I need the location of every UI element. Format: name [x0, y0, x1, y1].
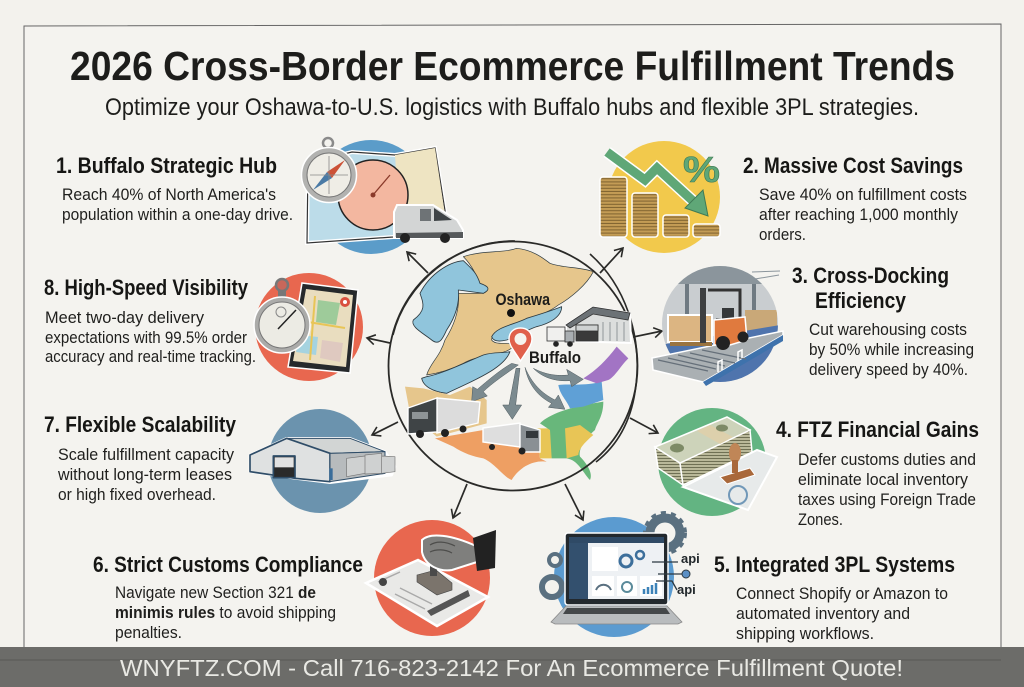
text 4: FTZ Financial Gains: 4. FTZ Financial Gains	[776, 417, 979, 442]
text 2: Massive Cost Savings: after reaching 1,000 monthly	[759, 206, 959, 224]
footer band	[0, 647, 1024, 687]
truck south	[483, 423, 540, 454]
text 1: Buffalo Strategic Hub	[56, 153, 293, 224]
Buffalo pin	[509, 328, 532, 361]
title: 2026 Cross-Border Ecommerce Fulfillment Trends	[70, 43, 955, 89]
icon 2: coins and falling arrow	[600, 141, 720, 253]
text 6: Strict Customs Compliance	[93, 552, 363, 642]
Oshawa marker	[507, 309, 515, 317]
Oshawa label: Oshawa	[496, 291, 551, 309]
text 8: High-Speed Visibility	[44, 275, 256, 366]
text 6: Strict Customs Compliance: 6. Strict Customs Compliance	[93, 552, 363, 577]
text 3: Cross-Docking Efficiency: Cut warehousing costs	[809, 321, 967, 339]
text 4: FTZ Financial Gains: taxes using Foreign Trade	[798, 491, 976, 509]
warehouse in map	[547, 307, 631, 346]
icon 6: customs stamp and document	[366, 520, 496, 636]
text 8: High-Speed Visibility: accuracy and real-time tracking.	[45, 348, 256, 366]
text 6: Strict Customs Compliance: Navigate new Section 321 de	[115, 584, 316, 602]
subtitle: Optimize your Oshawa-to-U.S. logistics with Buffalo hubs and flexible 3PL strategies.	[105, 94, 919, 121]
text 2: Massive Cost Savings: orders.	[759, 226, 806, 244]
arrows radiating to the eight topics	[367, 248, 662, 520]
icon 3: forklift on conveyor	[652, 264, 783, 386]
icon 5: laptop with gears and api	[542, 513, 700, 637]
text 2: Massive Cost Savings: 2. Massive Cost Savings	[743, 153, 963, 178]
text 8: High-Speed Visibility: expectations with 99.5% order	[45, 329, 247, 347]
text 7: Flexible Scalability: or high fixed overhead.	[58, 486, 216, 504]
text 1: Buffalo Strategic Hub: 1. Buffalo Strategic Hub	[56, 153, 277, 178]
icon 7: warehouse	[250, 409, 395, 513]
text 3: Cross-Docking Efficiency: by 50% while increasing	[809, 341, 974, 359]
text 3: Cross-Docking Efficiency: 3. Cross-Docking	[792, 263, 949, 288]
hand-drawn circle	[388, 241, 638, 490]
icon 1: map, compass and van	[302, 138, 463, 254]
text 6: Strict Customs Compliance: minimis rules to avoid shipping	[115, 604, 336, 622]
text 4: FTZ Financial Gains	[776, 417, 979, 529]
text 1: Buffalo Strategic Hub: Reach 40% of North America's	[62, 186, 276, 204]
text 7: Flexible Scalability	[44, 412, 237, 504]
text 4: FTZ Financial Gains: Zones.	[798, 511, 843, 529]
text 8: High-Speed Visibility: Meet two-day delivery	[45, 309, 205, 327]
distribution arrows from Buffalo	[472, 363, 583, 419]
text 3: Cross-Docking Efficiency: Efficiency	[815, 288, 907, 313]
text 3: Cross-Docking Efficiency: delivery speed by 40%.	[809, 361, 968, 379]
text 4: FTZ Financial Gains: eliminate local inventory	[798, 471, 969, 489]
text 5: Integrated 3PL Systems: shipping workflows.	[736, 625, 874, 643]
icon 2: coins and falling arrow: %	[683, 149, 720, 190]
central map: Oshawa to Buffalo distribution	[388, 241, 638, 490]
map shapes	[405, 248, 628, 480]
text 5: Integrated 3PL Systems: automated inventory and	[736, 605, 910, 623]
icon 8: stopwatch and tablet map	[254, 273, 363, 381]
icon 4: cash stack and stamp	[655, 408, 777, 516]
icon 5: laptop with gears and api: api	[677, 582, 696, 597]
text 1: Buffalo Strategic Hub: population within a one-day drive.	[62, 206, 293, 224]
text 5: Integrated 3PL Systems: 5. Integrated 3PL Systems	[714, 552, 955, 577]
text 7: Flexible Scalability: Scale fulfillment capacity	[58, 446, 235, 464]
text 6: Strict Customs Compliance: penalties.	[115, 624, 182, 642]
truck west	[408, 398, 480, 438]
text 2: Massive Cost Savings	[743, 153, 967, 244]
text 8: High-Speed Visibility: 8. High-Speed Visibility	[44, 275, 249, 300]
text 5: Integrated 3PL Systems: Connect Shopify or Amazon to	[736, 585, 948, 603]
text 4: FTZ Financial Gains: Defer customs duties and	[798, 451, 976, 469]
text 3: Cross-Docking Efficiency	[792, 263, 974, 379]
text 7: Flexible Scalability: without long-term leases	[57, 466, 232, 484]
text 2: Massive Cost Savings: Save 40% on fulfillment costs	[759, 186, 967, 204]
footer call to action: WNYFTZ.COM - Call 716-823-2142 For An Ecommerce Fulfillment Quote!	[120, 655, 903, 681]
icon 5: laptop with gears and api: api	[681, 551, 700, 566]
text 7: Flexible Scalability: 7. Flexible Scalability	[44, 412, 237, 437]
Buffalo label: Buffalo	[529, 349, 581, 367]
text 5: Integrated 3PL Systems	[714, 552, 955, 643]
